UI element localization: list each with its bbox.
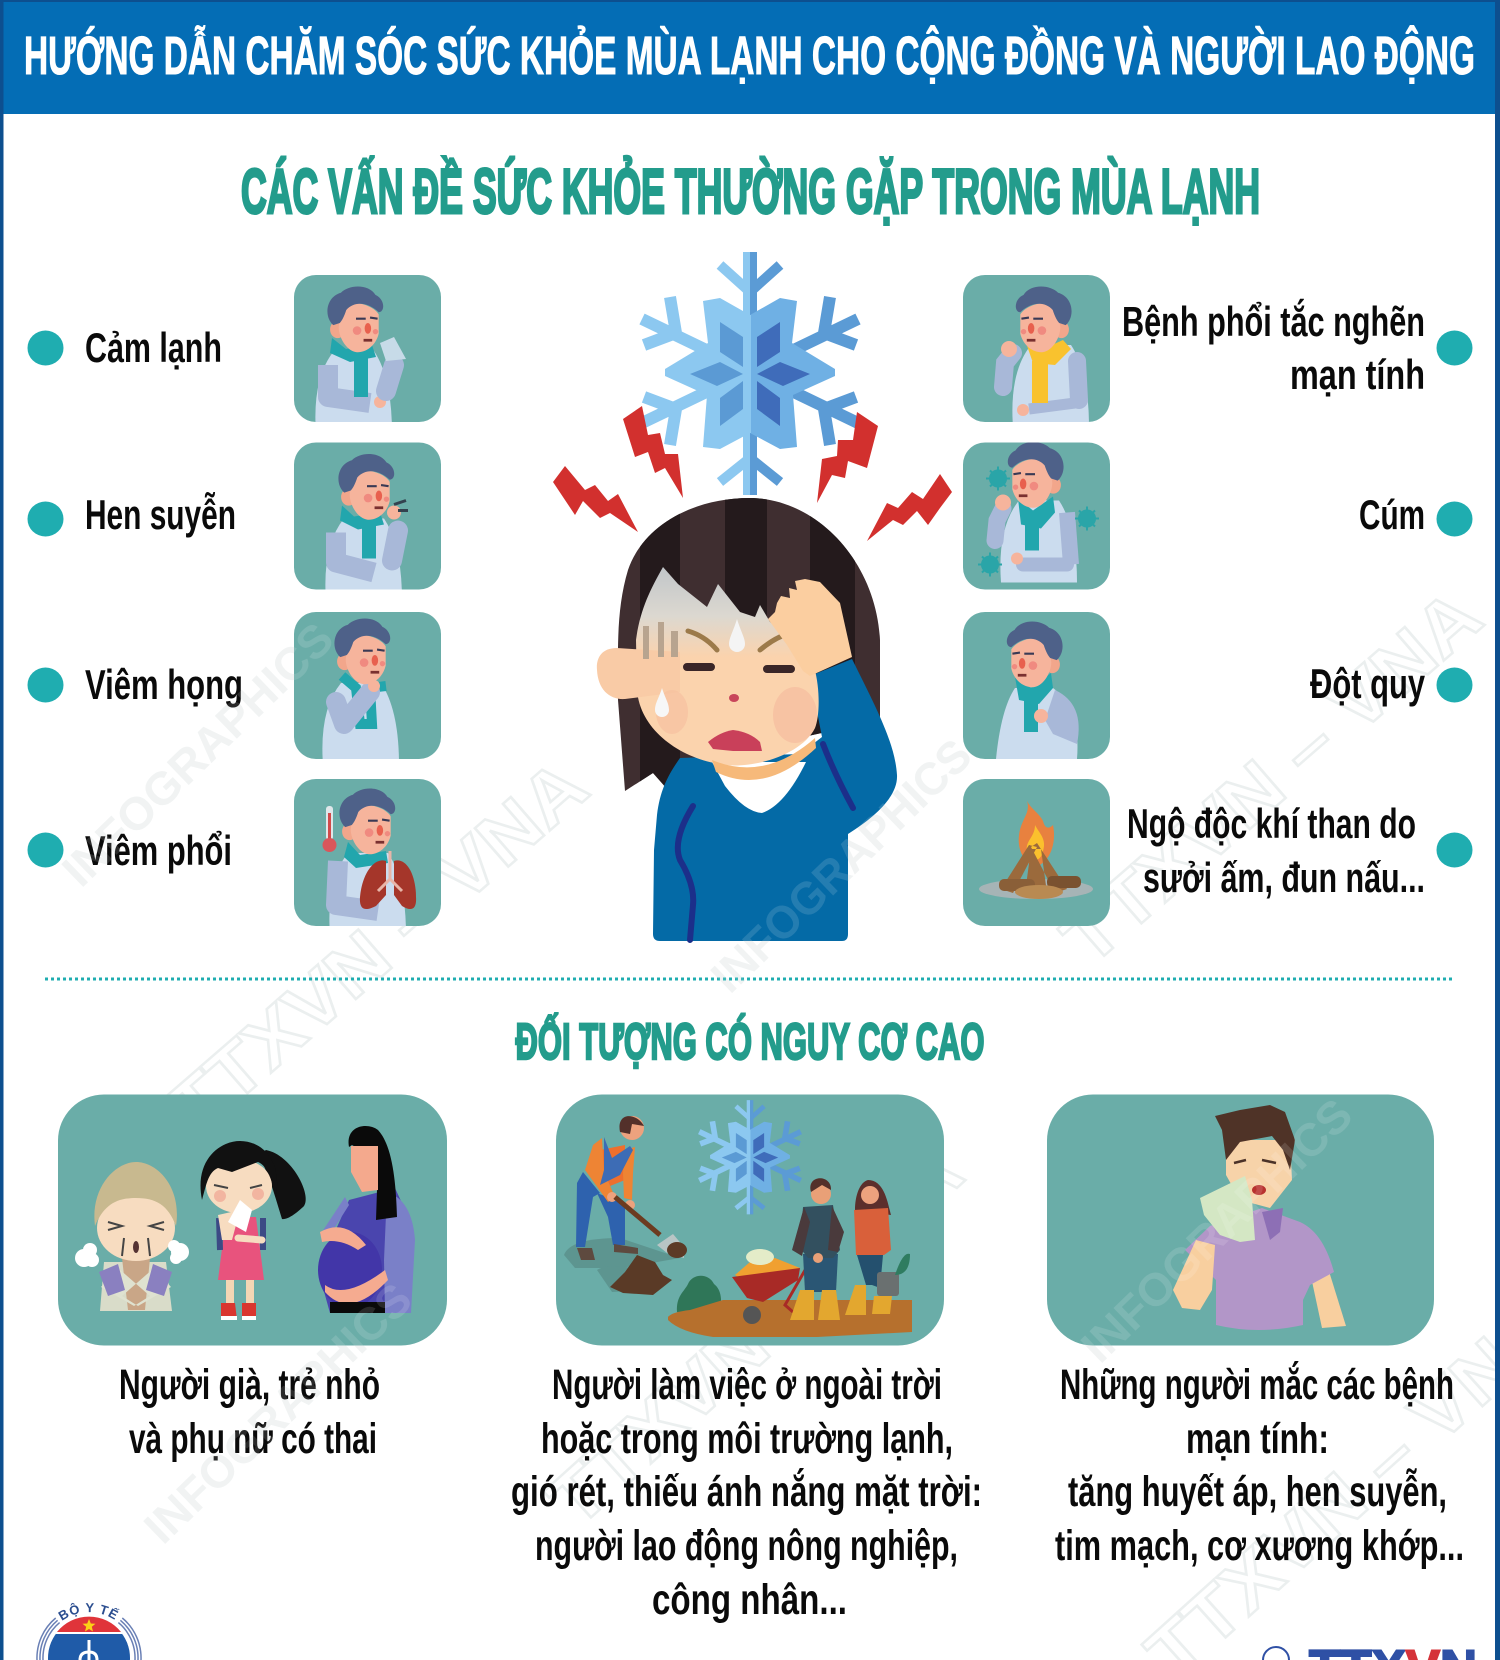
- neck shadow: [712, 738, 816, 780]
- hair: [618, 498, 880, 791]
- icon card: sore throat: [294, 612, 441, 765]
- watermark outlines: TTXVN – VNA: [152, 743, 603, 1150]
- watermark outlines: TTXVN – VNA: [532, 1129, 978, 1542]
- dirt pile: [610, 1255, 672, 1295]
- panel: chronic disease patient: [1047, 1094, 1434, 1346]
- caption: outdoor workers: Người làm việc ở ngoài trời: [552, 1361, 942, 1409]
- girl: [201, 1141, 306, 1320]
- left list: bullets and labels: Viêm họng: [85, 661, 243, 708]
- caption: elderly, children, pregnant: [119, 1361, 380, 1463]
- small snowflake: [699, 1100, 801, 1214]
- sweat drops: [729, 619, 745, 652]
- left list: bullets and labels: [28, 324, 243, 874]
- caption: elderly, children, pregnant: và phụ nữ có thai: [129, 1415, 377, 1463]
- caption: outdoor workers: gió rét, thiếu ánh nắng mặt trời:: [511, 1467, 982, 1516]
- icon card: pneumonia: [294, 779, 441, 935]
- old man: [75, 1162, 189, 1311]
- mouth: [708, 730, 762, 751]
- caption: outdoor workers: [511, 1361, 982, 1624]
- caption: elderly, children, pregnant: Người già, trẻ nhỏ: [119, 1361, 380, 1409]
- forehead lines: [643, 622, 678, 659]
- virus particles: [978, 466, 1099, 576]
- eyes: [687, 667, 791, 669]
- worker with shovel: [576, 1116, 687, 1260]
- watermark highlight over cards: [52, 612, 1362, 1553]
- central illustration: snowflake: [642, 252, 858, 495]
- watermark highlight over cards: INFOGRAPHICS: [701, 729, 982, 1002]
- caption: outdoor workers: hoặc trong môi trường lạnh,: [541, 1415, 953, 1463]
- icon card: chronic lung disease: [963, 275, 1110, 427]
- arm left: [1173, 1240, 1215, 1310]
- watermark outlines: INFOGRAPHICS: [134, 1273, 422, 1553]
- caption: outdoor workers: công nhân...: [652, 1576, 847, 1624]
- man farmer: [790, 1178, 844, 1320]
- right list: bullets and labels: Đột quy: [1310, 660, 1425, 707]
- wheelbarrow: [732, 1249, 812, 1324]
- icon card: flu: [963, 442, 1110, 590]
- lungs: [360, 851, 416, 909]
- shirt: [1185, 1208, 1334, 1330]
- left list: bullets and labels: Hen suyễn: [85, 490, 236, 538]
- dotted divider: [45, 978, 1455, 980]
- tissue: [1200, 1176, 1255, 1242]
- caption: outdoor workers: người lao động nông nghiệp,: [535, 1522, 958, 1570]
- hair: [1215, 1105, 1295, 1170]
- eyebrows: [688, 631, 782, 650]
- central illustration: woman with headache: [597, 490, 897, 941]
- watermark highlight over cards: INFOGRAPHICS: [1071, 1088, 1362, 1372]
- nose: [729, 694, 739, 702]
- watermark outlines: TTXVN – VNA: [1046, 573, 1497, 980]
- caption: chronic disease: [1055, 1360, 1464, 1570]
- logo: Bộ Y tế: [36, 1602, 142, 1660]
- section heading: high risk groups: ĐỐI TƯỢNG CÓ NGUY CƠ CAO: [516, 1012, 984, 1070]
- pregnant woman: [318, 1126, 415, 1313]
- left list: bullets and labels: Cảm lạnh: [85, 324, 222, 371]
- watermark highlight over cards: INFOGRAPHICS: [134, 1273, 422, 1553]
- ground: [668, 1300, 912, 1337]
- face: [636, 567, 819, 766]
- hand: [768, 579, 852, 676]
- watermark outlines: INFOGRAPHICS: [701, 729, 982, 1002]
- watermark outlines: INFOGRAPHICS: [1071, 1088, 1362, 1372]
- collar: [712, 762, 806, 813]
- woman farmer: [845, 1180, 910, 1315]
- watermark outlines: INFOGRAPHICS: [52, 612, 343, 896]
- shadow: [564, 1238, 680, 1268]
- icon card: asthma: [294, 442, 441, 600]
- icon card: charcoal poisoning fire: [963, 779, 1110, 926]
- sweater: [653, 659, 897, 941]
- watermark highlight over cards: INFOGRAPHICS: [52, 612, 343, 896]
- sweater seams: [678, 744, 853, 940]
- lightning bolts: [553, 406, 952, 541]
- header band: [0, 0, 1500, 114]
- face: [1226, 1140, 1292, 1208]
- panel: outdoor workers: [556, 1094, 944, 1346]
- watermark outlines: [52, 573, 1500, 1660]
- bush: [677, 1276, 721, 1316]
- closed eyes and mouth: [1234, 1160, 1276, 1163]
- left list: bullets and labels: Viêm phổi: [85, 827, 232, 874]
- panel: elderly, children, pregnant women: [58, 1094, 447, 1346]
- cheeks: [656, 690, 688, 734]
- arm right: [1310, 1268, 1346, 1328]
- logo: Bộ Y tế: BỘ Y TẾ: [58, 1602, 120, 1620]
- right list: bullets and labels: Cúm: [1359, 491, 1425, 538]
- icon card: stroke: [963, 612, 1110, 759]
- ear: [597, 648, 680, 699]
- right list: bullets and labels: [1122, 297, 1472, 901]
- right list: bullets and labels: mạn tính: [1290, 351, 1425, 398]
- thermometer: [322, 806, 336, 852]
- icon card: cold: [294, 275, 441, 433]
- caption: chronic disease: mạn tính:: [1186, 1415, 1329, 1463]
